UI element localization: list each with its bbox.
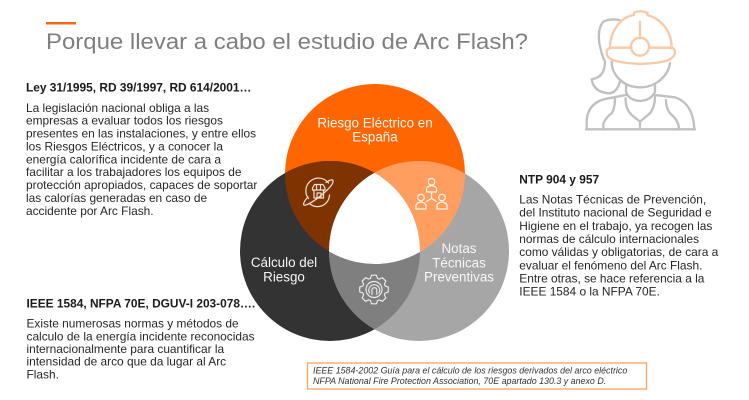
- text block: legislation: presentes en las instalaciones, y entre ellos: [26, 127, 256, 141]
- text block: NTP: evaluar el fenómeno del Arc Flash.: [519, 258, 702, 272]
- text block: NTP: [519, 172, 719, 299]
- label: Notas Técnicas Preventivas: Técnicas: [432, 255, 486, 270]
- label: Cálculo del Riesgo: Cálculo del: [251, 255, 317, 270]
- venn diagram: [240, 84, 509, 341]
- text block: NTP: Entre otras, se hace referencia a la: [519, 272, 705, 286]
- label: Riesgo Eléctrico en España: España: [352, 130, 398, 145]
- footnote box: IEEE 1584-2002 Guía para el cálculo de los riesgos derivados del arco eléctrico: [313, 365, 627, 375]
- text block: standards: [26, 296, 255, 381]
- text block: legislation: empresas a evaluar todos los riesgos: [26, 114, 223, 128]
- label: Riesgo Eléctrico en España: Riesgo Eléctrico en: [317, 116, 433, 130]
- text block: legislation: protección apropiados, capaces de soportar: [26, 178, 257, 192]
- overlap: top right: [329, 161, 465, 252]
- text block: NTP: como válidas y obligatorias, de cara a: [519, 245, 719, 259]
- icon: gear: [360, 275, 388, 304]
- text block: standards: Existe numerosas normas y métodos de: [26, 317, 239, 331]
- overlap: bottom: [329, 173, 420, 329]
- text block: legislation: La legislación nacional obliga a las: [26, 101, 209, 115]
- circle: Notas Técnicas: [329, 161, 509, 341]
- text block: legislation: accidente por Arc Flash.: [26, 204, 154, 218]
- footnote box: NFPA National Fire Protection Association, 70E apartado 130.3 y anexo D.: [313, 376, 606, 386]
- label: Notas Técnicas Preventivas: Preventivas: [424, 270, 494, 285]
- text block: NTP: NTP 904 y 957: [519, 172, 599, 186]
- label: Cálculo del Riesgo: Riesgo: [263, 269, 305, 284]
- overlap: centre: [329, 172, 420, 264]
- text block: NTP: del Instituto nacional de Seguridad e: [519, 206, 712, 220]
- text block: standards: calculo de la energía incidente reconocidas: [26, 329, 255, 343]
- text block: standards: internacionalmente para cuantificar la: [26, 342, 225, 356]
- text block: legislation: facilitar a los trabajadores los equipos de: [26, 165, 242, 179]
- text block: legislation: Ley 31/1995, RD 39/1997, RD 614/2001…: [26, 80, 251, 94]
- icon: globe store: [304, 178, 333, 207]
- text block: NTP: Las Notas Técnicas de Prevención,: [519, 192, 706, 206]
- text block: standards: Flash.: [26, 367, 59, 381]
- text block: NTP: IEEE 1584 o la NFPA 70E.: [519, 285, 660, 299]
- overlap: top left: [285, 161, 374, 252]
- text block: legislation: energía calorífica incidente de cara a: [26, 152, 221, 166]
- icon: people network: [416, 178, 447, 209]
- text block: legislation: los Riesgos Eléctricos, y a conocer la: [26, 140, 223, 154]
- title accent bar: [46, 22, 76, 24]
- text block: NTP: normas de cálculo internacionales: [519, 232, 699, 246]
- footnote box: [308, 363, 646, 389]
- circle: Riesgo Eléctrico: [285, 84, 465, 264]
- text block: NTP: Higiene en el trabajo, ya recogen las: [519, 219, 712, 233]
- title: Porque llevar a cabo el estudio de Arc Flash?: [46, 29, 528, 54]
- text block: standards: IEEE 1584, NFPA 70E, DGUV-I 203-078….: [26, 296, 255, 310]
- icon: worker with helmet: [586, 11, 695, 129]
- text block: legislation: [26, 80, 257, 218]
- circle: Cálculo del Riesgo: [240, 161, 420, 341]
- label: Notas Técnicas Preventivas: Notas: [442, 241, 476, 256]
- text block: standards: intensidad de arco que da lugar al Arc: [26, 355, 226, 369]
- text block: legislation: las calorías generadas en caso de: [26, 191, 208, 205]
